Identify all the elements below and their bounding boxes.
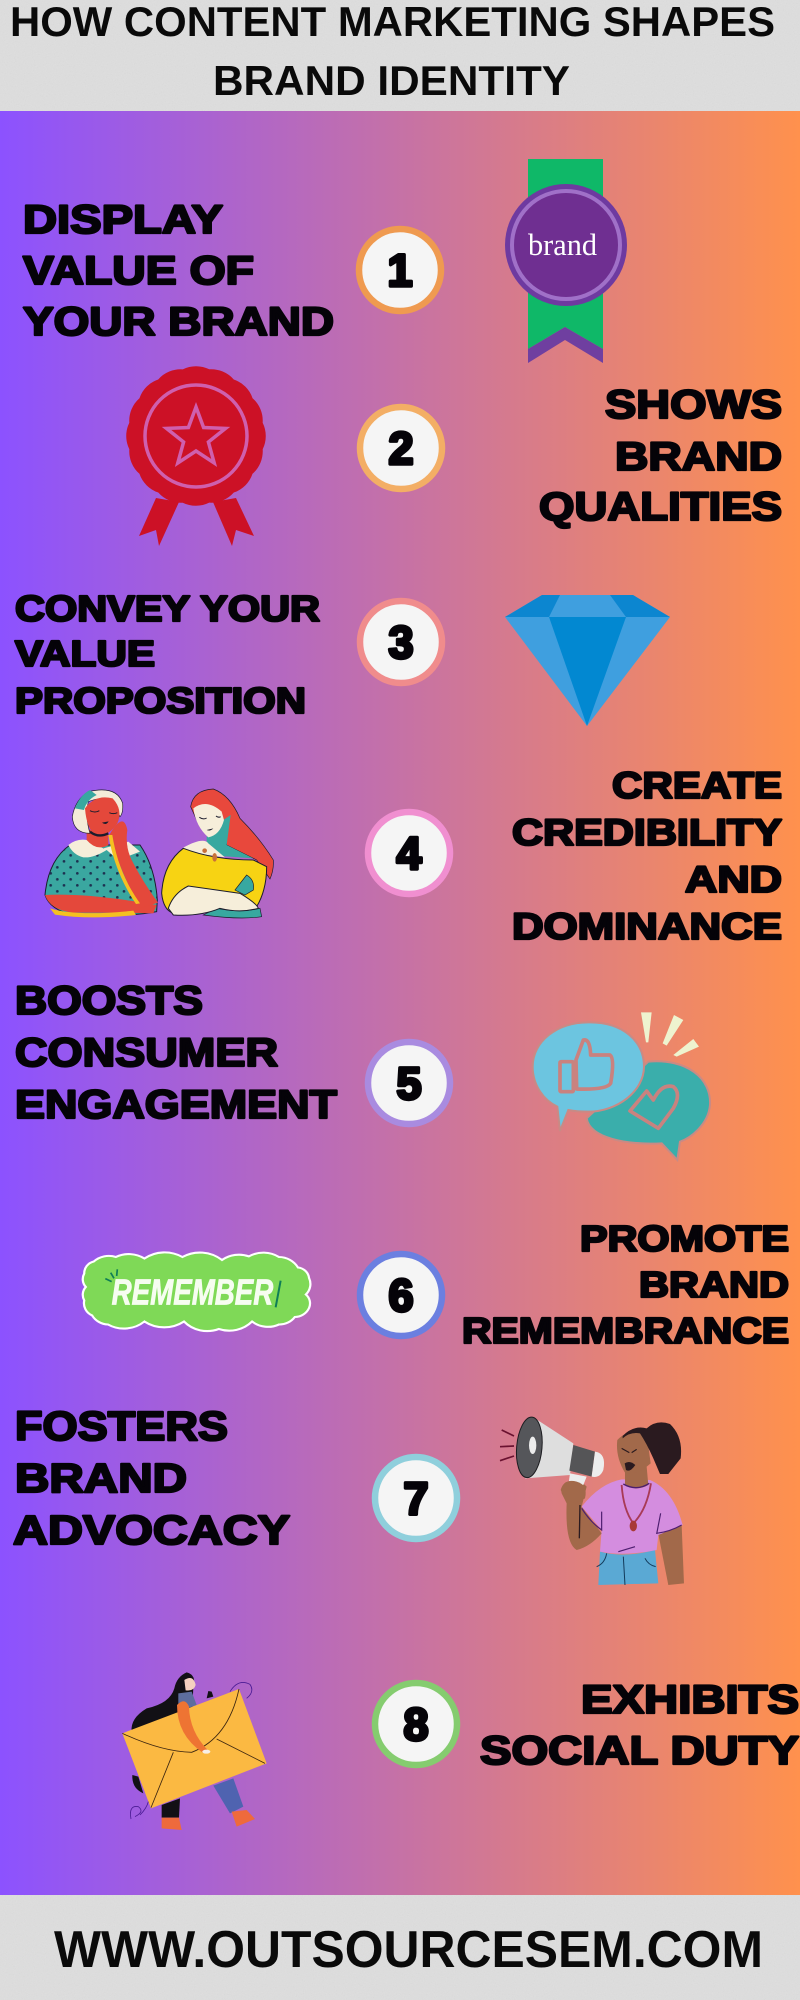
item 4 heading: AND xyxy=(685,859,782,900)
number badge 6: 6 xyxy=(388,1270,414,1321)
icon: brand ribbon: brand xyxy=(528,227,597,262)
item 8 heading: SOCIAL DUTY xyxy=(480,1729,799,1773)
item 6 heading: BRAND xyxy=(639,1264,789,1305)
title band xyxy=(0,0,800,111)
number badge 1 xyxy=(359,229,441,311)
number badge 2: 2 xyxy=(388,423,414,474)
title xyxy=(10,0,775,104)
item 7 heading: ADVOCACY xyxy=(13,1507,290,1553)
item 8 heading xyxy=(480,1678,799,1773)
number badge 8 xyxy=(375,1683,457,1765)
item 3 heading xyxy=(15,588,320,721)
item 7 heading xyxy=(13,1403,290,1553)
number badge 5 xyxy=(368,1042,450,1124)
icon: red rosette medal xyxy=(115,355,277,546)
illustration: two women talking xyxy=(45,789,273,918)
footer website text: WWW.OUTSOURCESEM.COM xyxy=(54,1921,763,1979)
number badge 5: 5 xyxy=(396,1058,422,1109)
item 6 heading xyxy=(462,1218,789,1351)
item 4 heading xyxy=(512,765,782,947)
number badge 7 xyxy=(375,1457,457,1539)
number badge 4 xyxy=(368,812,450,894)
item 1 heading: VALUE OF xyxy=(23,249,254,293)
number badge 7: 7 xyxy=(403,1473,429,1524)
item 6 heading: REMEMBRANCE xyxy=(462,1310,789,1351)
number badge 6 xyxy=(360,1254,442,1336)
item 8 heading: EXHIBITS xyxy=(581,1678,799,1722)
item 4 heading: CREDIBILITY xyxy=(512,812,782,853)
item 3 heading: CONVEY YOUR xyxy=(15,588,320,629)
item 1 heading: YOUR BRAND xyxy=(23,300,334,344)
item 2 heading: QUALITIES xyxy=(539,485,782,529)
icon: like and heart speech bubbles xyxy=(533,1012,710,1160)
title: BRAND IDENTITY xyxy=(213,57,570,104)
item 2 heading: BRAND xyxy=(615,435,782,479)
item 5 heading: CONSUMER xyxy=(15,1031,278,1075)
number badge 1: 1 xyxy=(387,245,413,296)
item 1 heading: DISPLAY xyxy=(23,198,223,242)
item 2 heading: SHOWS xyxy=(605,383,782,427)
item 7 heading: BRAND xyxy=(15,1455,187,1501)
item 7 heading: FOSTERS xyxy=(15,1403,228,1449)
item 1 heading xyxy=(23,198,334,344)
item 3 heading: PROPOSITION xyxy=(15,680,306,721)
number badge 4: 4 xyxy=(396,828,422,879)
item 4 heading: CREATE xyxy=(612,765,782,806)
item 6 heading: PROMOTE xyxy=(580,1218,789,1259)
number badge 8: 8 xyxy=(403,1699,429,1750)
number badge 3: 3 xyxy=(388,617,414,668)
sticker: remember cloud xyxy=(83,1252,310,1331)
item 5 heading: ENGAGEMENT xyxy=(15,1083,337,1127)
number badge 2 xyxy=(360,407,442,489)
illustration: person with megaphone xyxy=(500,1416,684,1585)
icon: brand ribbon xyxy=(505,159,627,363)
item 4 heading: DOMINANCE xyxy=(512,906,782,947)
illustration: woman carrying envelope xyxy=(122,1672,267,1830)
item 3 heading: VALUE xyxy=(15,633,155,674)
icon: blue diamond xyxy=(505,595,670,726)
sticker: remember cloud: REMEMBER xyxy=(112,1272,273,1313)
number badge 3 xyxy=(360,601,442,683)
item 5 heading: BOOSTS xyxy=(15,979,203,1023)
item 5 heading xyxy=(15,979,337,1127)
item 2 heading xyxy=(539,383,782,529)
footer band xyxy=(0,1895,800,2000)
